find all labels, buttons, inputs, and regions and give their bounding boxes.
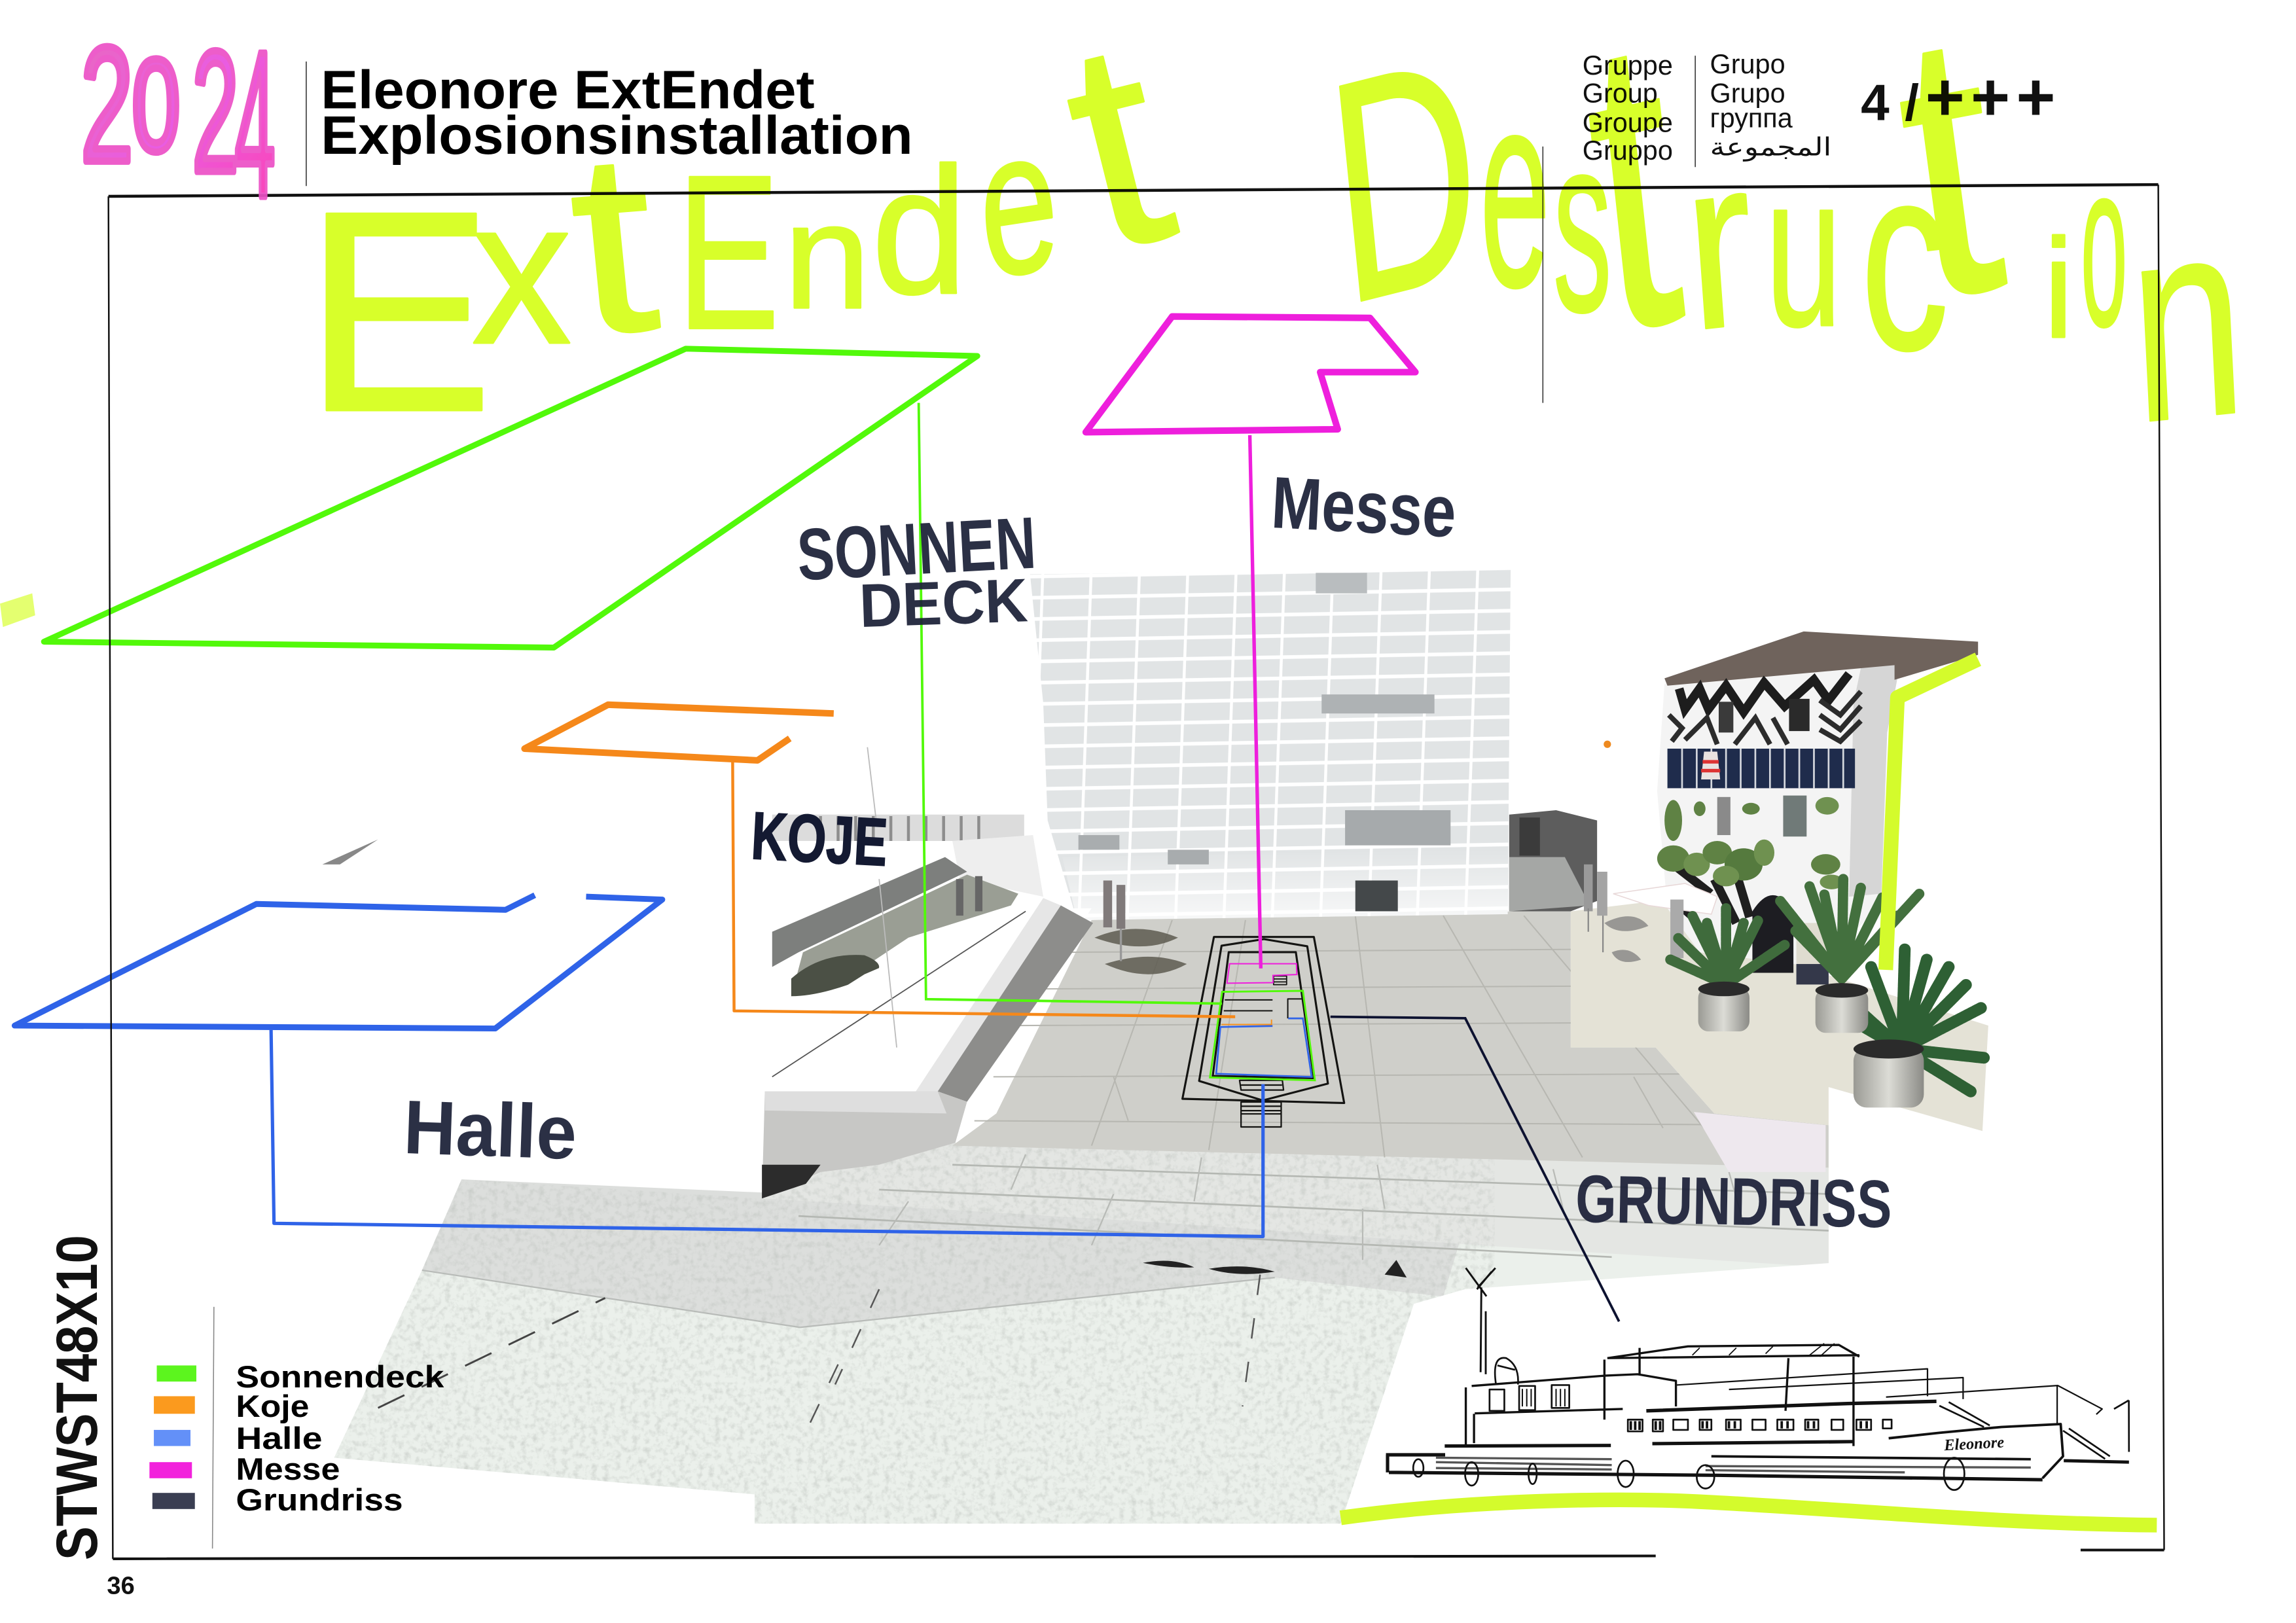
handwritten title: ExtEndet Destruction: x	[472, 156, 571, 387]
legend item: Koje: Koje	[236, 1389, 309, 1423]
house facade	[1657, 662, 1901, 967]
plan gangway stairs	[1240, 1080, 1283, 1127]
divider: title	[306, 62, 307, 186]
leader line: Messe	[1086, 317, 1416, 969]
photo: pink-tinted wall piece	[1694, 1112, 1825, 1172]
group translations: группа	[1710, 103, 1793, 134]
legend item: Messe	[149, 1452, 340, 1486]
photo: dark stairwell beside the building	[1509, 810, 1597, 911]
house climbing plants	[1657, 797, 1843, 889]
handwritten title: ExtEndet Destruction: n	[784, 173, 870, 340]
outline: Messe in plan	[1227, 964, 1297, 983]
boat fenders	[1413, 1459, 1424, 1477]
group translations: Grupo	[1710, 49, 1785, 79]
legend item: Koje	[154, 1389, 309, 1423]
brush stroke: lime line on house	[1886, 659, 1978, 970]
leader line: Sonnendeck	[44, 349, 1222, 1003]
handwritten label: Messe: Messe	[1270, 461, 1458, 553]
group translations: Gruppe	[1583, 50, 1673, 80]
handwritten label: Grundriss: GRUNDRISS	[1575, 1161, 1893, 1241]
group translations: Group	[1583, 79, 1658, 109]
brush stroke: lime smudge left	[0, 594, 35, 627]
handwritten title: ExtEndet Destruction: i	[2044, 209, 2073, 367]
handwritten year: 2024: 0	[132, 32, 180, 179]
brush stroke: lime underline beneath the boat	[1340, 1500, 2157, 1525]
legend item: Grundriss: Grundriss	[236, 1482, 403, 1517]
group number: +	[1926, 60, 1965, 135]
group translations: Groupe	[1583, 107, 1673, 137]
handwritten label: Halle: Halle	[403, 1084, 578, 1175]
outline: Koje in plan	[1221, 1020, 1272, 1025]
handwritten title: ExtEndet Destruction: u	[1766, 130, 1842, 372]
panel: photo collage of the plaza	[323, 569, 1988, 1539]
legend item: Halle: Halle	[236, 1421, 323, 1455]
small orange dot	[1604, 741, 1611, 748]
photo: stairs in the foreground	[323, 1143, 1829, 1539]
house solar panels	[1668, 749, 1855, 788]
group number: +	[1971, 60, 2010, 135]
handwritten title: ExtEndet Destruction: d	[872, 131, 967, 332]
boat stairs	[1939, 1400, 2129, 1459]
group number: /	[1905, 74, 1919, 132]
plan hull outline	[1199, 939, 1328, 1100]
photo: glass facade building	[1030, 569, 1511, 920]
floor plan on the plaza	[1183, 937, 1344, 1127]
group translations: Gruppo	[1583, 135, 1673, 166]
boat name: Eleonore	[1943, 1434, 2005, 1454]
title: Eleonore ExtEndet	[321, 60, 815, 120]
handwritten year: 2024: 2	[81, 13, 134, 196]
leader line: Grundriss	[1331, 1017, 1619, 1321]
handwritten year: 2024: 2	[192, 15, 239, 208]
photo: zigzag painted house with palms	[1613, 632, 1984, 1107]
handwritten title: ExtEndet Destruction: c	[1861, 111, 1948, 405]
plan outer frame	[1183, 937, 1344, 1103]
handwritten title: ExtEndet Destruction: e	[1480, 35, 1551, 346]
legend item: Sonnendeck: Sonnendeck	[236, 1359, 444, 1394]
page number: 36	[107, 1573, 135, 1600]
divider: centre vertical	[1542, 147, 1543, 403]
handwritten label: Sonnen Deck: SONNEN	[795, 502, 1038, 596]
plan inner rooms	[1224, 999, 1302, 1018]
outline: Halle in plan	[1216, 1018, 1312, 1077]
boat cabin	[1466, 1348, 1676, 1446]
group translations: المجموعة	[1710, 132, 1831, 162]
handwritten title: ExtEndet Destruction: n	[2119, 161, 2251, 482]
handwritten title: ExtEndet Destruction: e	[965, 86, 1066, 322]
handwritten title: ExtEndet Destruction	[303, 0, 2251, 482]
boat upper deck roof	[1607, 1345, 1859, 1446]
house zigzag painting	[1679, 674, 1849, 712]
handwritten label: Sonnen Deck	[795, 502, 1038, 640]
house windows	[1783, 796, 1806, 836]
boat mast	[1466, 1268, 1496, 1374]
legend item: Grundriss	[152, 1482, 403, 1517]
legend item: Halle	[154, 1421, 323, 1455]
leader line: Halle	[14, 895, 1263, 1236]
boat long rails	[1676, 1369, 2102, 1424]
photo: concrete retaining wall	[762, 898, 1093, 1198]
illustration: boat Eleonore line drawing	[1386, 1268, 2129, 1490]
handwritten label: Koje: KOJE	[749, 798, 889, 880]
plan inner hull	[1213, 952, 1314, 1078]
page frame	[109, 185, 2164, 1559]
house roof	[1664, 632, 1978, 686]
stray dark brush mark	[323, 840, 378, 865]
photo: parasols and shadows	[1094, 865, 1649, 974]
boat funnel arc	[1495, 1358, 1518, 1385]
photo: plaza floor	[952, 911, 1829, 1168]
house doorway	[1752, 895, 1793, 972]
plan small stair	[1274, 976, 1287, 985]
handwritten title: ExtEndet Destruction: E	[303, 152, 493, 471]
handwritten title: ExtEndet Destruction: r	[1674, 107, 1763, 381]
palm fronds	[1670, 879, 1984, 1092]
legend item: Messe: Messe	[236, 1452, 340, 1486]
title: Explosionsinstallation	[321, 105, 913, 166]
handwritten title: ExtEndet Destruction: s	[1553, 82, 1612, 365]
photo: cobbled pavement on the right	[1571, 901, 1988, 1131]
group translations: Grupo	[1710, 79, 1785, 109]
leader line: Koje	[524, 705, 1235, 1017]
handwritten title: ExtEndet Destruction: t	[562, 96, 668, 389]
panel: white card behind boat	[1340, 1263, 2154, 1524]
cafe table	[1613, 883, 1717, 914]
boat window row	[1628, 1419, 1892, 1431]
handwritten title: ExtEndet Destruction: o	[2081, 113, 2128, 375]
group number: +	[2016, 60, 2056, 135]
text: 4	[234, 9, 276, 241]
planters	[1698, 982, 1924, 1107]
title	[321, 60, 913, 166]
legend	[149, 1307, 444, 1548]
handwritten title: ExtEndet Destruction: E	[677, 130, 780, 375]
group number: 4	[1861, 74, 1890, 132]
legend item: Sonnendeck	[157, 1359, 444, 1394]
outline: Sonnendeck in plan	[1210, 991, 1315, 1080]
vertical code label: STWST48X10	[44, 1235, 109, 1560]
handwritten label: Sonnen Deck: DECK	[858, 565, 1029, 640]
group translations	[1583, 49, 1831, 167]
photo: bridge and ramp on the left	[771, 747, 1092, 1092]
boat hull	[1386, 1442, 2043, 1480]
